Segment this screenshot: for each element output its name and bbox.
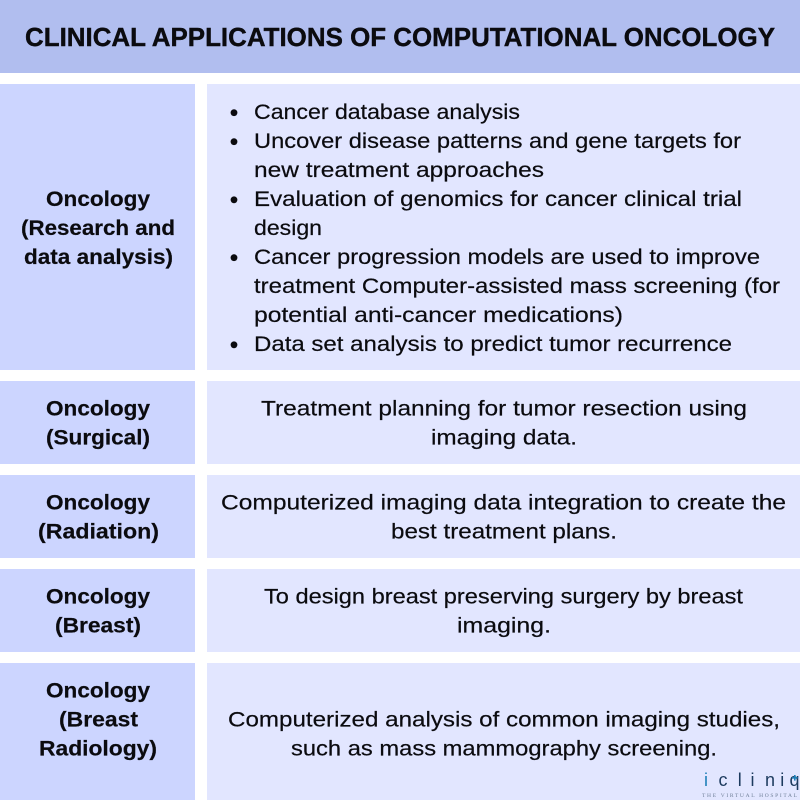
panel: surgical label [0,381,195,464]
panel: radiation label [0,475,195,558]
panel: radiation label: (Radiation) [38,520,159,544]
panel: radiation description [207,475,800,558]
panel: research and data analysis bullet list: Evaluation of genomics for cancer clinical trial [254,187,742,211]
panel: research and data analysis label: Oncology [46,187,150,211]
panel: breast label: (Breast) [55,614,141,638]
panel: breast description [207,569,800,652]
panel: breast radiology label [0,663,195,800]
icon: iclinic logo [702,770,800,799]
panel: research and data analysis label: (Research and [21,216,175,240]
title banner: CLINICAL APPLICATIONS OF COMPUTATIONAL ONCOLOGY [25,22,775,52]
panel: radiation label: Oncology [46,490,150,514]
panel: surgical description: Treatment planning for tumor resection using [261,396,747,420]
panel: research and data analysis bullet list: Cancer database analysis [254,100,520,124]
icon: iclinic logo: i [704,770,708,790]
panel: research and data analysis label: data analysis) [24,245,173,269]
panel: research and data analysis bullet list: Data set analysis to predict tumor recurrence [254,332,732,356]
panel: surgical description: imaging data. [431,426,577,450]
panel: surgical label: Oncology [46,396,150,420]
panel: breast radiology description: Computerized analysis of common imaging studies, [228,708,780,732]
panel: research and data analysis bullet list: potential anti-cancer medications) [254,303,623,327]
panel: radiation description: Computerized imaging data integration to create the [221,490,786,514]
icon: iclinic logo: THE VIRTUAL HOSPITAL [702,793,798,799]
panel: surgical label: (Surgical) [46,426,150,450]
panel: research and data analysis label [0,84,195,370]
panel: research and data analysis bullet list: Uncover disease patterns and gene targets for [254,129,741,153]
panel: research and data analysis bullet list: new treatment approaches [254,158,544,182]
panel: research and data analysis bullet list: Cancer progression models are used to improve [254,245,760,269]
panel: breast description: To design breast preserving surgery by breast [264,584,743,608]
icon: iclinic logo: cliniq [718,770,800,790]
title banner [0,0,800,73]
panel: breast radiology description [207,663,800,800]
panel: research and data analysis bullet list [207,84,800,370]
panel: breast description: imaging. [457,614,551,638]
panel: surgical description [207,381,800,464]
panel: research and data analysis bullet list: treatment Computer-assisted mass screening (for [254,274,780,298]
panel: breast radiology label: Oncology [46,678,150,702]
panel: radiation description: best treatment plans. [391,520,617,544]
panel: research and data analysis bullet list: design [254,216,322,240]
panel: breast radiology label: Radiology) [39,736,157,760]
panel: breast radiology description: such as mass mammography screening. [291,736,717,760]
panel: breast label: Oncology [46,584,150,608]
panel: breast label [0,569,195,652]
panel: breast radiology label: (Breast [59,708,138,732]
